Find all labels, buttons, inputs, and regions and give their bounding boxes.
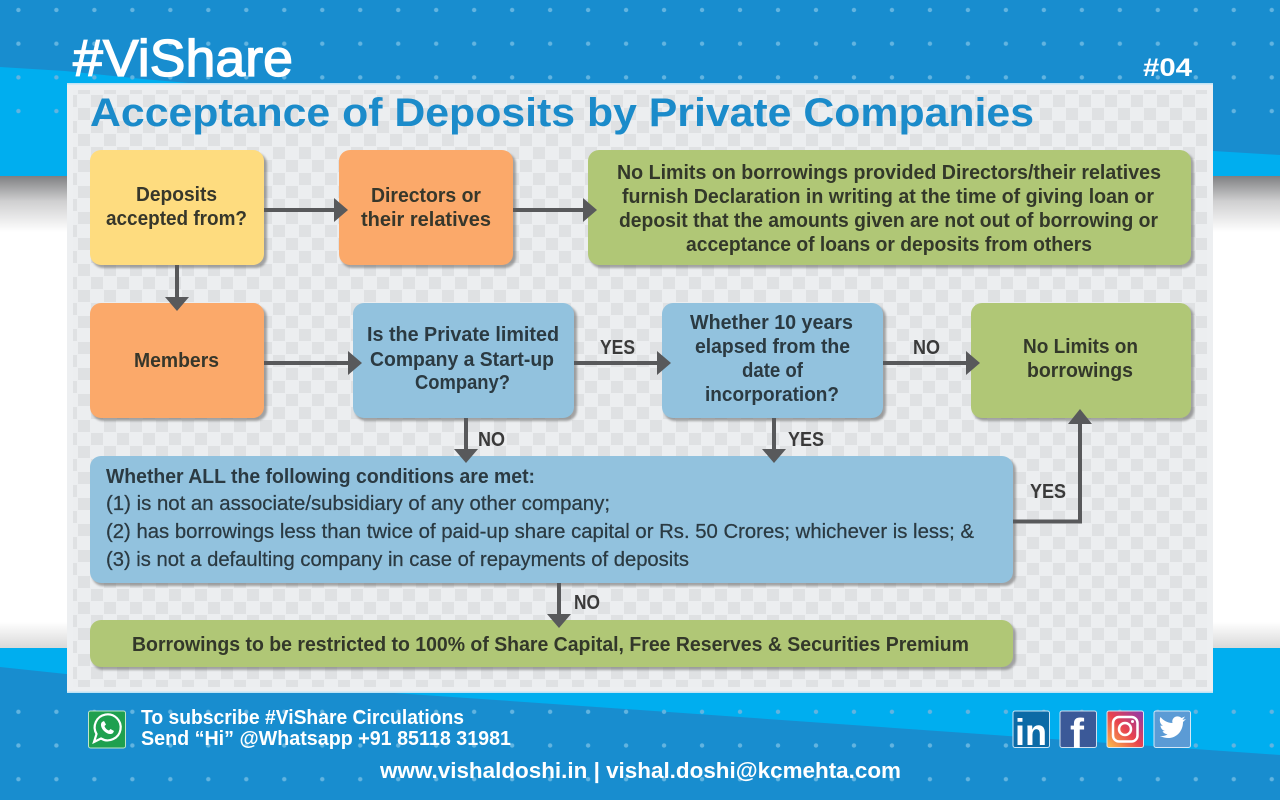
box: no limits on borrowings (971, 303, 1194, 421)
box: no limits with declaration: deposit that the amounts given are not out of borrowing or (619, 209, 1158, 232)
box: no limits with declaration: acceptance of loans or deposits from others (686, 233, 1092, 256)
box: 10 years question: incorporation? (705, 383, 839, 406)
box: directors or their relatives: Directors or (371, 184, 481, 207)
footer: subscribe text (141, 706, 511, 750)
box: conditions (90, 456, 1016, 586)
icon: facebook (1060, 710, 1096, 757)
box: conditions: Whether ALL the following conditions are met: (106, 465, 535, 488)
label: yes 1: YES (600, 337, 635, 359)
box: members: Members (134, 349, 219, 372)
arrow: start-up yes (574, 351, 671, 375)
issue number: #04 (1143, 54, 1192, 82)
title: Acceptance of Deposits by Private Companies (90, 91, 1034, 135)
box: members (90, 303, 267, 421)
box: start-up question: Company a Start-up (370, 348, 554, 371)
label: yes 3: YES (1030, 481, 1066, 503)
arrow: 10 years yes (762, 418, 786, 463)
box: deposits accepted from (90, 150, 267, 268)
box: 10 years question: Whether 10 years (690, 311, 853, 334)
box: no limits with declaration: furnish Declaration in writing at the time of giving loan or (622, 185, 1154, 208)
label: no 2: NO (478, 429, 505, 451)
arrow: deposits to members (165, 265, 189, 311)
panel: flowchart background (67, 83, 1213, 693)
brand heading: #ViShare: #ViShare (73, 30, 293, 88)
box: directors or their relatives (339, 150, 516, 268)
box: borrowings restricted (90, 620, 1016, 670)
box: directors or their relatives: their relatives (361, 208, 491, 231)
box: no limits on borrowings: No Limits on (1023, 335, 1138, 358)
box: start-up question: Is the Private limited (367, 323, 559, 346)
arrow: conditions no (547, 583, 571, 628)
icon: instagram (1107, 711, 1144, 748)
footer: subscribe text: To subscribe #ViShare Circulations (141, 706, 464, 729)
box: deposits accepted from: accepted from? (106, 207, 247, 230)
box: no limits with declaration: No Limits on borrowings provided Directors/their relatives (617, 161, 1161, 184)
box: 10 years question: elapsed from the (695, 335, 850, 358)
icon: whatsapp (88, 711, 126, 748)
label: no 3: NO (574, 592, 600, 614)
footer: subscribe text: Send “Hi” @Whatsapp +91 85118 31981 (141, 727, 511, 750)
box: 10 years question (662, 303, 886, 421)
box: 10 years question: date of (742, 359, 803, 382)
icon: facebook: f (1070, 710, 1085, 757)
arrow: directors to declaration (513, 198, 597, 222)
arrow: start-up no (454, 418, 478, 463)
box: no limits on borrowings: borrowings (1027, 359, 1133, 382)
footer: website and email: www.vishaldoshi.in | vishal.doshi@kcmehta.com (379, 758, 901, 783)
box: conditions: (3) is not a defaulting company in case of repayments of deposits (106, 548, 689, 571)
box: start-up question (353, 303, 577, 421)
box: start-up question: Company? (415, 371, 510, 394)
box: conditions: (2) has borrowings less than twice of paid-up share capital or Rs. 50 Crores; whichever is less; & (106, 520, 974, 543)
arrow: deposits to directors (264, 198, 348, 222)
box: deposits accepted from: Deposits (136, 183, 217, 206)
arrow: conditions yes (1013, 409, 1092, 524)
box: conditions: (1) is not an associate/subsidiary of any other company; (106, 492, 610, 515)
label: no 1: NO (913, 337, 940, 359)
icon: linkedin: in (1015, 712, 1047, 753)
icon: twitter (1154, 711, 1190, 748)
arrow: members to start-up question (264, 351, 362, 375)
label: yes 2: YES (788, 429, 824, 451)
box: no limits with declaration (588, 150, 1194, 268)
arrow: 10 years no (883, 351, 980, 375)
box: borrowings restricted: Borrowings to be restricted to 100% of Share Capital, Free Reserves & Securities Premium (132, 633, 969, 656)
